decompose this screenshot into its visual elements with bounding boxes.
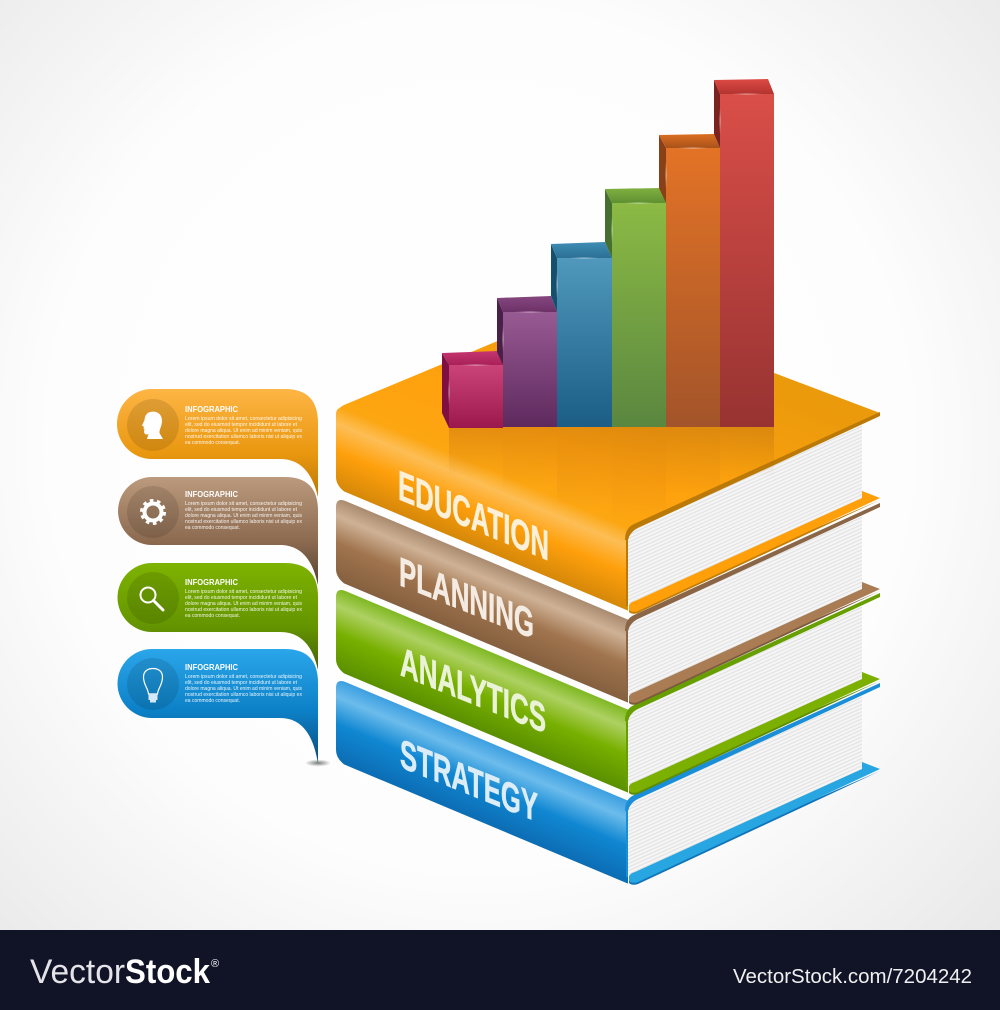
book: education — [336, 303, 880, 614]
text: green callout — [185, 578, 302, 619]
book: strategy — [336, 678, 880, 885]
footer bar — [0, 930, 1000, 1010]
text: orange callout: dolore magna aliqua. Ut enim ad minim veniam, quis — [185, 428, 302, 434]
book: analytics — [336, 587, 880, 795]
text: orange callout: ea commodo consequat. — [185, 440, 240, 446]
logo: VectorStock: ® — [211, 958, 219, 970]
text: brown callout: INFOGRAPHIC — [185, 490, 238, 499]
panel: book stack — [336, 303, 880, 885]
footer url: VectorStock.com/7204242 — [733, 966, 972, 988]
bar 5: orange — [659, 134, 720, 427]
text: orange callout: nostrud exercitation ullamco laboris nisi ut aliquip ex — [185, 434, 302, 440]
label: ANALYTICS: ANALYTICS — [400, 638, 546, 743]
text: blue callout: nostrud exercitation ullamco laboris nisi ut aliquip ex — [185, 692, 302, 698]
text: orange callout: Lorem ipsum dolor sit amet, consectetur adipisicing — [185, 416, 302, 422]
bar 4: green — [605, 188, 666, 427]
text: green callout: ea commodo consequat. — [185, 613, 240, 619]
bar 6: red — [714, 79, 774, 427]
book: planning — [336, 497, 880, 705]
callout: orange — [117, 389, 318, 497]
text: green callout: Lorem ipsum dolor sit amet, consectetur adipisicing — [185, 589, 302, 595]
label: PLANNING: PLANNING — [399, 548, 534, 649]
text: green callout: elit, sed do eiusmod tempor incididunt ut labore et — [185, 595, 297, 601]
text: orange callout: elit, sed do eiusmod tempor incididunt ut labore et — [185, 422, 297, 428]
text: blue callout: dolore magna aliqua. Ut enim ad minim veniam, quis — [185, 686, 302, 692]
text: green callout: nostrud exercitation ullamco laboris nisi ut aliquip ex — [185, 607, 302, 613]
text: orange callout: INFOGRAPHIC — [185, 405, 238, 414]
text: brown callout — [185, 490, 302, 531]
text: brown callout: elit, sed do eiusmod tempor incididunt ut labore et — [185, 507, 297, 513]
text: brown callout: ea commodo consequat. — [185, 525, 240, 531]
label: EDUCATION: EDUCATION — [398, 462, 549, 571]
bar 1: crimson — [442, 351, 503, 428]
icon: magnifier — [140, 588, 163, 610]
top cover — [336, 303, 880, 536]
bar 2: purple — [497, 296, 557, 427]
text: green callout: dolore magna aliqua. Ut enim ad minim veniam, quis — [185, 601, 302, 607]
text: brown callout: nostrud exercitation ullamco laboris nisi ut aliquip ex — [185, 519, 302, 525]
icon: light bulb — [144, 668, 162, 702]
text: orange callout — [185, 405, 302, 446]
bar chart — [442, 79, 774, 428]
callout shadow — [305, 760, 331, 766]
text: blue callout: INFOGRAPHIC — [185, 663, 238, 672]
logo: VectorStock: Stock — [125, 953, 210, 991]
text: blue callout: Lorem ipsum dolor sit amet, consectetur adipisicing — [185, 674, 302, 680]
icon: head — [142, 412, 163, 439]
logo: VectorStock: Vector — [30, 953, 125, 991]
bar reflections — [449, 427, 774, 517]
bar 3: blue — [551, 242, 612, 427]
logo: VectorStock — [30, 953, 219, 991]
text: blue callout: elit, sed do eiusmod tempor incididunt ut labore et — [185, 680, 297, 686]
callout: blue — [118, 649, 318, 763]
text: brown callout: Lorem ipsum dolor sit amet, consectetur adipisicing — [185, 501, 302, 507]
text: brown callout: dolore magna aliqua. Ut enim ad minim veniam, quis — [185, 513, 302, 519]
icon: gear — [142, 500, 164, 524]
text: blue callout: ea commodo consequat. — [185, 698, 240, 704]
text: blue callout — [185, 663, 302, 704]
callout: brown — [118, 477, 318, 585]
text: green callout: INFOGRAPHIC — [185, 578, 238, 587]
label: STRATEGY: STRATEGY — [400, 730, 538, 832]
callout: green — [118, 563, 318, 670]
